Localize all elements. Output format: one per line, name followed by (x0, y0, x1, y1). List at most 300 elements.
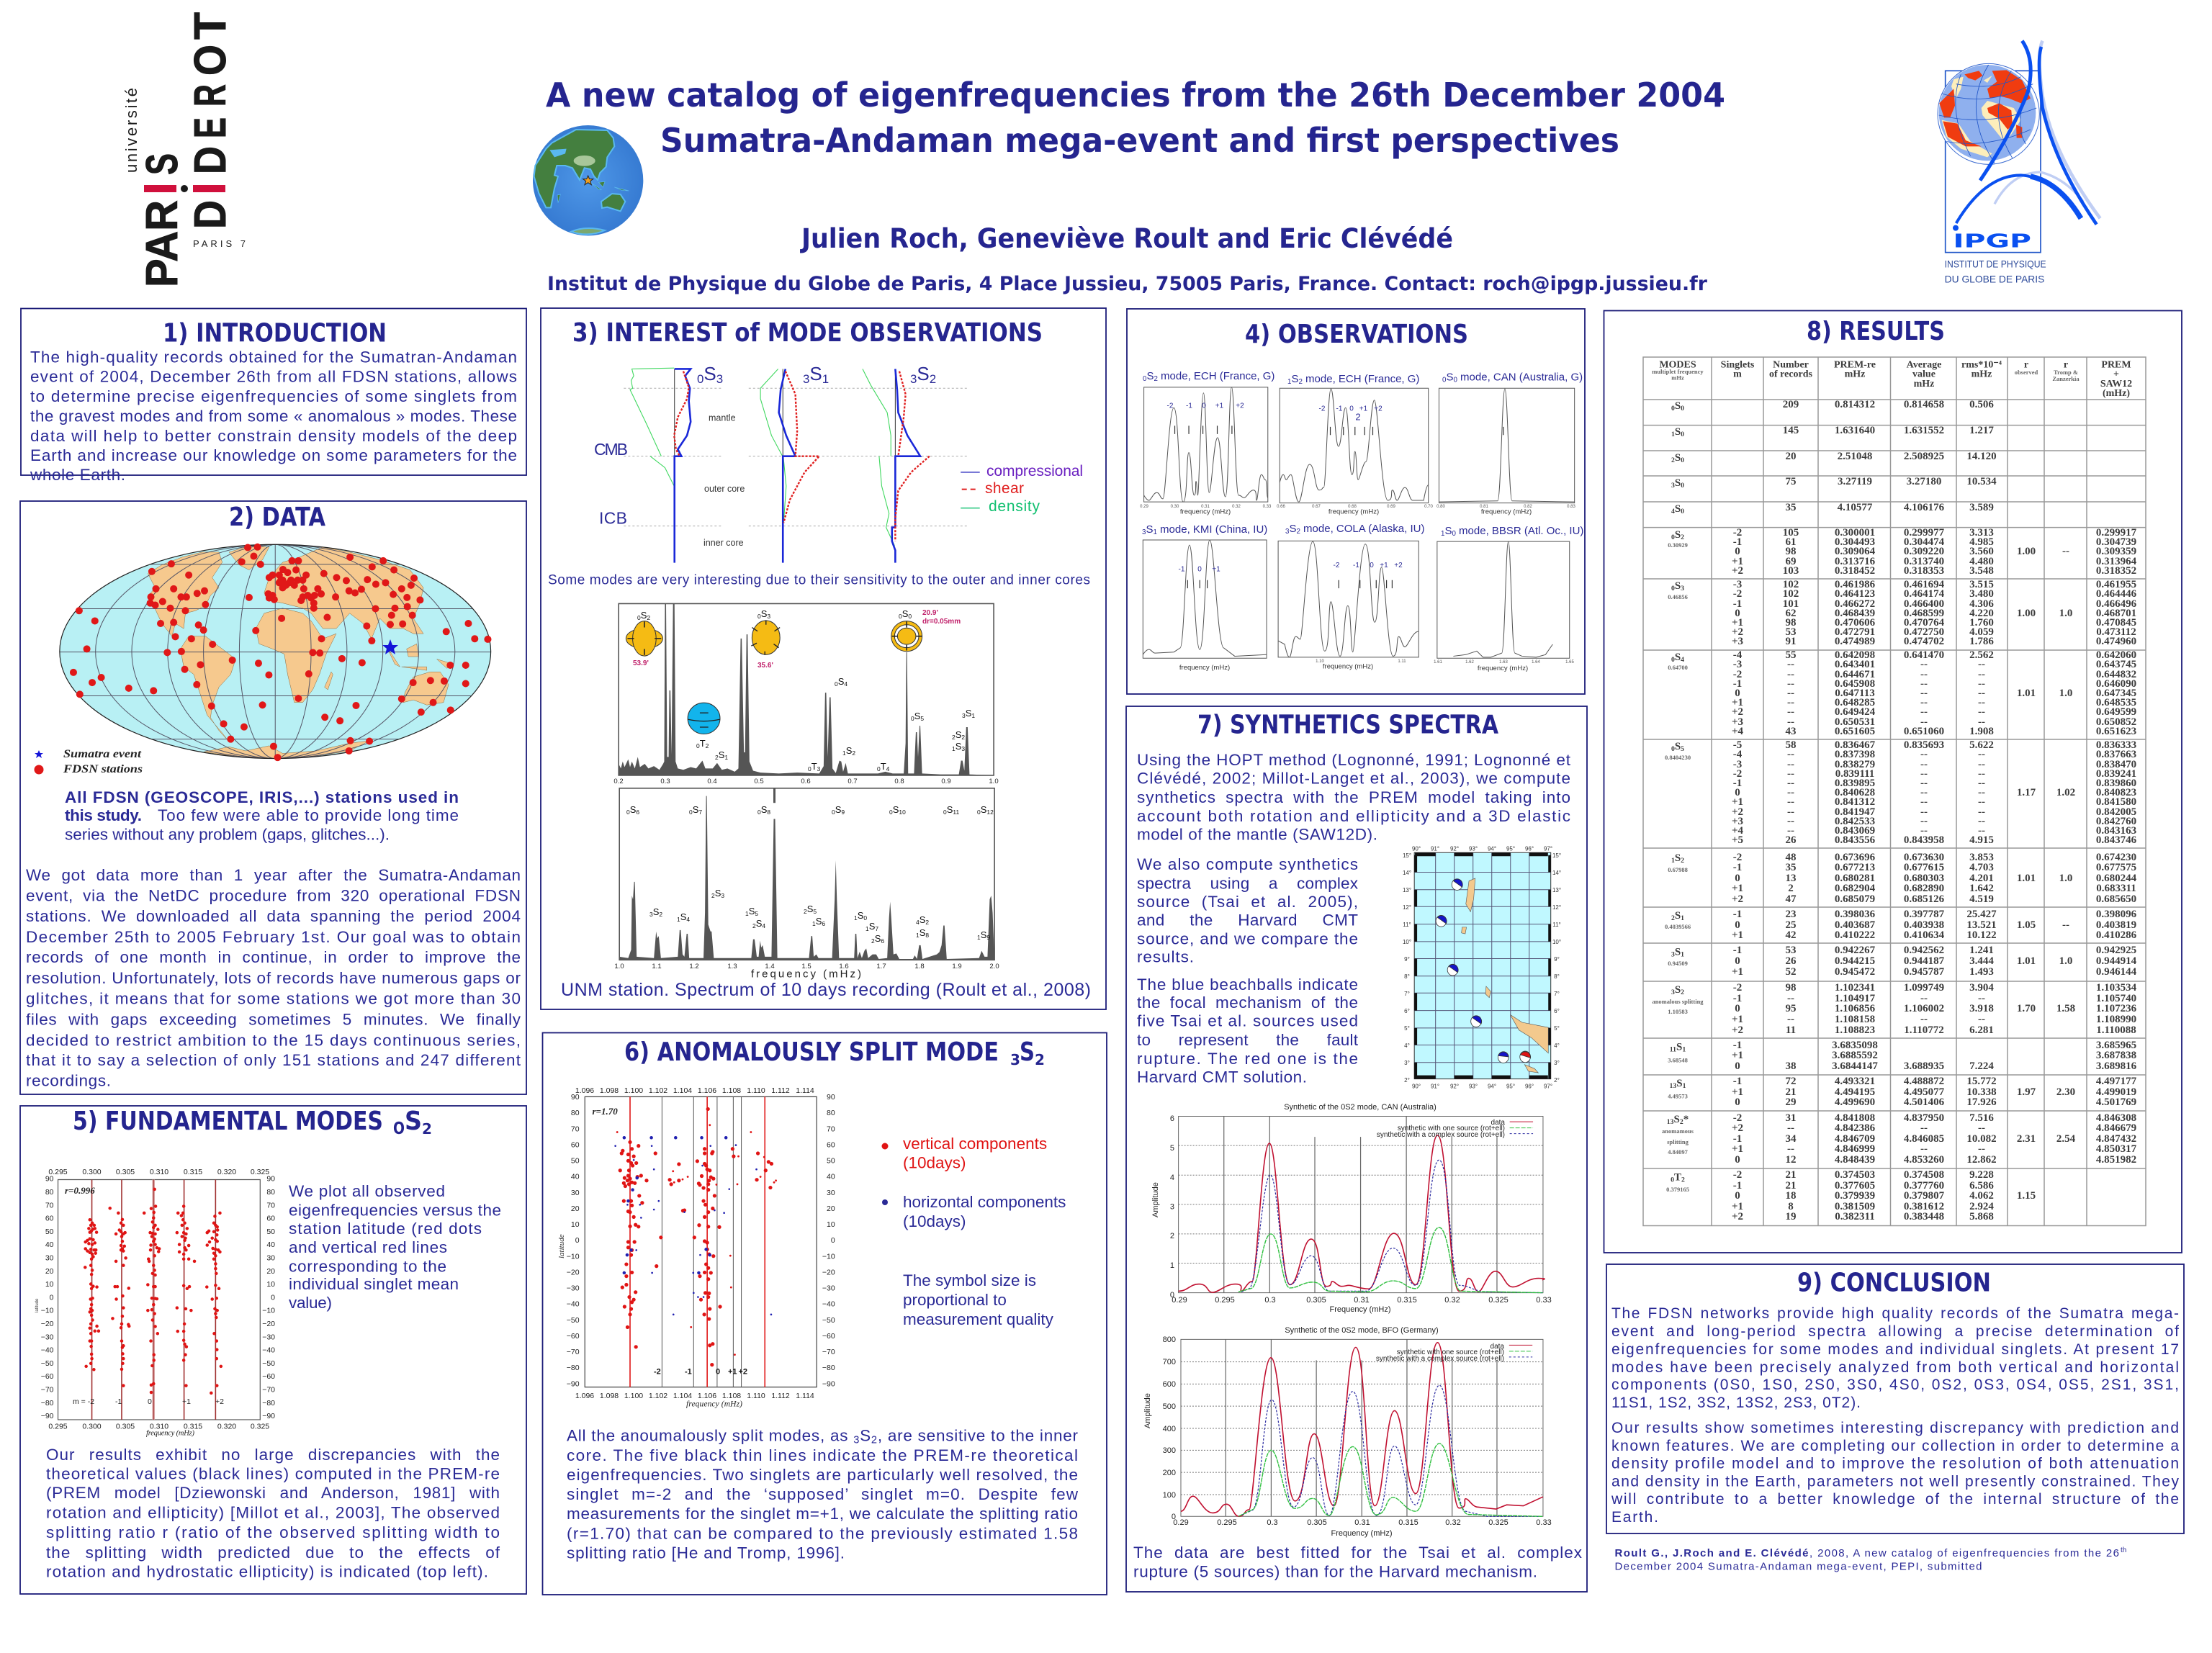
results table: 0.942925 0.944914 0.946144 (2096, 945, 2136, 978)
scatter plot: 3S2 singlets versus latitude: 30 (827, 1189, 835, 1197)
chart: mode sensitivity profiles: ICB (599, 508, 627, 527)
results table: 1.15 (2017, 1190, 2036, 1202)
results table: 0.397787 0.403938 0.410634 (1904, 909, 1944, 941)
map: Andaman sources and beachballs: 9° (1554, 956, 1560, 963)
chart: spectrum 1.0-2.0 mHz: 1.4 (765, 963, 775, 970)
results table: 53 26 52 (1786, 945, 1796, 978)
results table: 0.836467 0.837398 0.838279 0.839111 0.839895 0.840628 0.841312 0.841947 0.842533 0.843069 0.843556 (1835, 739, 1875, 846)
map caption: All FDSN (GEOSCOPE, IRIS,...) stations used in (65, 788, 459, 806)
text block: 11S1, 1S2, 3S2, 13S2, 2S3, 0T2). (1611, 1395, 1861, 1411)
results table: 23 25 42 (1786, 909, 1796, 941)
map: Andaman sources and beachballs: 95° (1506, 1083, 1515, 1090)
results table: 0.814658 (1904, 399, 1944, 410)
results table: 3.6835098 3.6885592 3.6844147 (1832, 1040, 1878, 1072)
map: Andaman sources and beachballs: 6° (1404, 1008, 1410, 1014)
plot description: We plot all observed (289, 1182, 445, 1200)
chart: spectrum 1.0-2.0 mHz: 1S5 (745, 906, 758, 917)
results table: m (1733, 369, 1742, 380)
panel: 4) Observations (1127, 309, 1585, 694)
chart: synthetic 0S2 CAN: 3 (1170, 1202, 1174, 1211)
scatter plot: 3S2 singlets versus latitude: 90 (827, 1093, 835, 1102)
results table: 1.70 (2017, 1003, 2036, 1014)
scatter plot: 3S2 singlets versus latitude: −80 (822, 1364, 835, 1372)
chart: spectrum 0.2-1.0 mHz: 53.9' (633, 659, 649, 667)
results table: 0.461986 0.464123 0.466272 0.468439 0.470606 0.472791 0.474989 (1835, 579, 1875, 647)
chart: spectrum 0.2-1.0 mHz: 0S3 (757, 608, 770, 620)
chart: spectrum 1.0-2.0 mHz: 1S0 (854, 910, 867, 922)
chart: synthetic 0S2 CAN (1151, 1103, 1552, 1314)
results table: 15.772 10.338 17.926 (1966, 1076, 1997, 1108)
results table: -4 -3 -2 -1 0 +1 +2 +3 +4 (1732, 649, 1743, 737)
legend: (10days) (903, 1212, 966, 1230)
world map of stations (60, 544, 491, 759)
results table: 145 (1783, 425, 1799, 436)
results table: 1S0 (1671, 426, 1684, 438)
results table: 21 21 18 8 19 (1786, 1169, 1796, 1222)
results table: 1.10583 (1668, 1008, 1688, 1015)
scatter plot: 0S2 singlets versus latitude: −10 (262, 1307, 275, 1315)
results table: 1.02 (2056, 787, 2075, 798)
title: Sumatra-Andaman mega-event and first perspectives (660, 121, 1619, 160)
results table: -- (2062, 546, 2069, 557)
results table: 0.942562 0.944187 0.945787 (1904, 945, 1944, 978)
chart: spectrum 1.0-2.0 mHz: 0S7 (689, 804, 702, 816)
chart: six singlet spectra: 0S2 mode, ECH (France, G) (1143, 370, 1274, 383)
chart: six singlet spectra: -2 (1319, 405, 1326, 413)
scatter plot: 0S2 singlets versus latitude: 0 (271, 1293, 275, 1302)
scatter plot: 0S2 singlets versus latitude: −20 (41, 1320, 54, 1328)
map: Andaman sources and beachballs: 90° (1412, 1083, 1421, 1090)
results table: -1 0 +1 (1732, 945, 1743, 978)
results table: 1.01 (2017, 688, 2036, 699)
chart: six singlet spectra: 1.63 (1499, 660, 1508, 665)
scatter plot: 3S2 singlets versus latitude: −70 (567, 1348, 580, 1356)
scatter plot: 0S2 singlets versus latitude: 20 (45, 1267, 54, 1276)
chart: six singlet spectra: 0 (1197, 566, 1202, 574)
text block: decided to restrict ambition to the 15 days continuous series, (26, 1031, 521, 1050)
results table: Number (1773, 360, 1809, 371)
icon: Earth globe (533, 125, 643, 235)
chart: six singlet spectra: 0.67 (1312, 505, 1321, 509)
panel: 7) Synthetics spectra (1126, 706, 1587, 1592)
logo: université Paris Diderot: D (186, 200, 235, 229)
results table: + (2113, 369, 2119, 380)
text block: (r=1.70) that can be compared to the previously estimated 1.58 (567, 1525, 1078, 1543)
text block: beachballs: rupture. The red one is the (1137, 1050, 1358, 1068)
results table: 2S0 (1671, 452, 1684, 464)
chart: six singlet spectra: 1.62 (1465, 660, 1474, 665)
text block: event of 2004, December 26th from all FDSN stations, allows (30, 367, 517, 385)
results table: 75 (1786, 476, 1796, 487)
text block: core. The five black thin lines indicate the PREM-re theoretical (567, 1446, 1078, 1464)
results table: 0.641470 -- -- -- -- -- -- -- 0.651060 (1904, 649, 1944, 737)
results table: 0.398036 0.403687 0.410222 (1835, 909, 1875, 941)
results table: 1.01 (2017, 955, 2036, 967)
map: Andaman sources and beachballs: 91° (1431, 1083, 1439, 1090)
chart: six singlet spectra: 2 (1355, 412, 1361, 423)
text block (1137, 751, 1571, 843)
scatter plot: 3S2 singlets versus latitude: 0 (716, 1368, 720, 1377)
results table: -2 -1 0 +1 +2 (1732, 852, 1743, 905)
results table: PREM-re (1834, 360, 1876, 371)
scatter plot: 3S2 singlets versus latitude: −10 (822, 1252, 835, 1261)
map: Andaman sources and beachballs: 93° (1469, 1083, 1478, 1090)
results table: mHz (1845, 369, 1865, 380)
legend: vertical components (903, 1135, 1047, 1153)
results table: Zanzerkia (2052, 375, 2080, 382)
scatter plot: 0S2 singlets versus latitude: −50 (41, 1359, 54, 1368)
chart: synthetic 0S2 BFO: Synthetic of the 0S2 mode, BFO (Germany) (1285, 1326, 1439, 1335)
chart: six singlet spectra: +1 (1359, 405, 1368, 413)
text block: glitches, it means that for some stations we got more than 30 (26, 989, 521, 1008)
scatter plot: 0S2 singlets versus latitude: frequency (mHz) (146, 1429, 194, 1437)
chart: six singlet spectra: 0 (1370, 562, 1374, 569)
chart: synthetic 0S2 CAN: 1 (1170, 1261, 1174, 1270)
caption: Some modes are very interesting due to their sensitivity to the outer and inner cores (548, 573, 1090, 588)
chart: spectrum 1.0-2.0 mHz: 2S6 (871, 933, 884, 945)
results table: 0.461955 0.464446 0.466496 0.468701 0.470845 0.473112 0.474960 (2096, 579, 2136, 647)
results table: 0.461694 0.464174 0.466400 0.468599 0.470764 0.472750 0.474702 (1904, 579, 1944, 647)
results table: mHz (1671, 374, 1684, 382)
text block: records of one month in continue, in order to improve the (26, 948, 521, 966)
scatter plot: 0S2 singlets versus latitude: 60 (266, 1215, 275, 1223)
results table: 1.102341 1.104917 1.106856 1.108158 1.108823 (1835, 982, 1875, 1036)
chart: synthetic 0S2 BFO: synthetic with one source (rot+ell) (1397, 1348, 1504, 1356)
logo: IPGP (1938, 41, 2100, 285)
chart: synthetic 0S2 CAN: 0.31 (1354, 1296, 1370, 1305)
scatter plot: 0S2 singlets versus latitude: −40 (41, 1346, 54, 1355)
text block: Our results show sometimes interesting discrepancy with prediction and (1611, 1420, 2179, 1436)
scatter plot: 3S2 singlets versus latitude: 20 (571, 1204, 580, 1213)
map: Andaman sources and beachballs: 96° (1525, 1083, 1534, 1090)
text block: We got data more than 1 year after the Sumatra-Andaman (26, 866, 521, 884)
chart: six singlet spectra: 0.33 (1263, 505, 1272, 509)
legend: proportional to (903, 1291, 1007, 1309)
scatter plot: 3S2 singlets versus latitude: 1.104 (673, 1086, 692, 1095)
map: Andaman sources and beachballs: 93° (1469, 845, 1478, 852)
text block: complex source: spectra using a complex (1137, 874, 1359, 892)
chart: synthetic 0S2 CAN: 0.325 (1488, 1296, 1509, 1305)
chart: spectrum 0.2-1.0 mHz: 0.2 (613, 778, 624, 785)
chart: spectrum 1.0-2.0 mHz: 1.3 (727, 963, 737, 970)
scatter plot: 0S2 singlets versus latitude: 60 (45, 1215, 54, 1223)
chart: synthetic 0S2 CAN: 0.29 (1172, 1296, 1187, 1305)
chart: synthetic 0S2 CAN: synthetic with one source (rot+ell) (1398, 1125, 1505, 1132)
results table: -- (2062, 919, 2069, 931)
map: Andaman sources and beachballs: 7° (1404, 991, 1410, 997)
map legend: Sumatra event (63, 748, 142, 760)
chart: six singlet spectra: +2 (1236, 402, 1244, 410)
results table: 0.67988 (1668, 866, 1688, 873)
panel: 2) Data (20, 501, 526, 1094)
results table: 11S1 (1670, 1042, 1686, 1054)
plot description (289, 1182, 501, 1312)
logo: université Paris Diderot: PARIS 7 (193, 238, 246, 249)
chart: spectrum 0.2-1.0 mHz: 2S2 (952, 729, 965, 741)
text block: Earth and increase our knowledge on some parameters for the (30, 446, 517, 464)
chart: synthetic 0S2 CAN: Amplitude (1151, 1182, 1160, 1217)
text block: account both rotation and ellipticity and a 3D elastic (1137, 807, 1570, 825)
scatter plot: 3S2 singlets versus latitude: +2 (739, 1368, 747, 1377)
scatter plot: 3S2 singlets versus latitude: −20 (567, 1268, 580, 1276)
chart: spectrum 0.2-1.0 mHz: 0.5 (754, 778, 764, 785)
chart: synthetic 0S2 CAN: 5 (1170, 1144, 1174, 1153)
scatter plot: 0S2 singlets versus latitude: 20 (266, 1267, 275, 1276)
chart: spectrum 0.2-1.0 mHz (613, 603, 999, 785)
results table: 2.31 (2017, 1133, 2036, 1145)
chart: synthetic 0S2 BFO: 600 (1163, 1380, 1176, 1389)
chart: spectrum 1.0-2.0 mHz: 1.5 (801, 963, 811, 970)
plot description: value) (289, 1294, 332, 1312)
results table: 1.01 (2017, 873, 2036, 884)
scatter plot: 3S2 singlets versus latitude: r=1.70 (592, 1106, 618, 1117)
chart: synthetic 0S2 CAN: data (1491, 1119, 1505, 1127)
scatter plot: 0S2 singlets versus latitude: 50 (266, 1228, 275, 1236)
chart: spectrum 0.2-1.0 mHz: 35.6' (757, 662, 773, 670)
results table: r (2024, 360, 2028, 371)
chart: six singlet spectra: 0.29 (1140, 505, 1148, 509)
chart: synthetic 0S2 CAN: synthetic with a complex source (rot+ell) (1377, 1131, 1505, 1139)
map: Andaman sources and beachballs: 14° (1552, 870, 1561, 876)
chart: spectrum 1.0-2.0 mHz: frequency (mHz) (751, 968, 861, 981)
results table: 4.841808 4.842386 4.846709 4.846999 4.848439 (1835, 1112, 1875, 1166)
results table: 0.674230 0.677575 0.680244 0.683311 0.685650 (2096, 852, 2136, 905)
chart: spectrum 1.0-2.0 mHz: 0S9 (832, 804, 845, 816)
map legend (35, 748, 143, 775)
map: Andaman sources and beachballs: 10° (1552, 939, 1561, 945)
results table: 105 61 98 69 103 (1783, 527, 1799, 577)
results table: 0.4039566 (1665, 923, 1691, 930)
scatter plot: 0S2 singlets versus latitude: 0.315 (184, 1423, 202, 1431)
results table: 0S5 (1671, 741, 1684, 753)
text block: event, via the NetDC procedure from 320 operational FDSN (26, 887, 521, 905)
scatter plot: 3S2 singlets versus latitude: 80 (827, 1109, 835, 1117)
results table: 2.30 (2056, 1086, 2075, 1098)
results table: 1.58 (2056, 1003, 2075, 1014)
results table: 1.00 (2017, 546, 2036, 557)
scatter plot: 3S2 singlets versus latitude: +1 (728, 1368, 737, 1377)
results table: 0.94509 (1668, 960, 1688, 967)
chart: spectrum 0.2-1.0 mHz: 0T3 (808, 761, 821, 773)
chart: spectrum 1.0-2.0 mHz (614, 788, 999, 981)
text block: density profile model and to improve the resolution of both attenuation (1611, 1456, 2179, 1472)
results table: 3S1 (1671, 946, 1684, 959)
map: Andaman sources and beachballs: 94° (1488, 845, 1496, 852)
results table: 1.103534 1.105740 1.107236 1.108990 1.110088 (2096, 982, 2136, 1036)
text block: eigenfrequencies. Two singlets are particularly well resolved, the (567, 1466, 1078, 1484)
results table: 1.05 (2017, 919, 2036, 931)
chart: synthetic 0S2 BFO: Amplitude (1143, 1393, 1152, 1428)
text block: beachballs: five Tsai et al. sources used (1137, 1012, 1358, 1030)
heading: 8) RESULTS (1807, 317, 1945, 346)
chart: six singlet spectra: 1.65 (1565, 660, 1574, 665)
results table: 1.631552 (1904, 425, 1944, 436)
chart: synthetic 0S2 BFO: 300 (1163, 1446, 1176, 1455)
scatter plot: 3S2 singlets versus latitude: 50 (827, 1156, 835, 1165)
chart: six singlet spectra: -1 (1353, 562, 1359, 569)
scatter plot: 3S2 singlets versus latitude: −50 (822, 1316, 835, 1325)
results table: 3.68548 (1668, 1057, 1688, 1064)
scatter plot: 0S2 singlets versus latitude: 0.325 (251, 1168, 269, 1176)
text block: will contribute to a better knowledge of the internal structure of the (1611, 1491, 2179, 1508)
text block: the gravest modes and from some « anomalous » modes. These (30, 407, 517, 425)
legend: horizontal components (903, 1193, 1066, 1211)
chart: spectrum 0.2-1.0 mHz: 0.7 (848, 778, 858, 785)
text block: splitting ratio [He and Tromp, 1996]. (567, 1544, 845, 1562)
scatter plot: 3S2 singlets versus latitude: −60 (822, 1332, 835, 1341)
chart: six singlet spectra: -2 (1334, 562, 1340, 569)
affiliation: Institut de Physique du Globe de Paris, 4 Place Jussieu, 75005 Paris, France. Contact: roch@ipgp.jussieu.fr (547, 273, 1708, 295)
chart: synthetic 0S2 CAN: 0 (1170, 1291, 1174, 1300)
chart: synthetic 0S2 BFO: 0.29 (1173, 1518, 1189, 1527)
chart: spectrum 0.2-1.0 mHz: 0.9 (941, 778, 951, 785)
chart: spectrum 1.0-2.0 mHz: 2S4 (752, 918, 765, 929)
results table: 0S2 (1671, 529, 1684, 541)
results table: of records (1769, 369, 1813, 380)
chart: spectrum 0.2-1.0 mHz: 20.9' (922, 609, 938, 617)
chart: spectrum 1.0-2.0 mHz: 1.1 (652, 963, 662, 970)
logo: université Paris Diderot: T (186, 12, 235, 40)
chart: mode sensitivity profiles: shear (985, 480, 1024, 497)
text block: fit conclusion: The data are best fitted for the Tsai et al. complex (1133, 1544, 1583, 1562)
results table: 0.642060 0.643745 0.644832 0.646090 0.647345 0.648535 0.649599 0.650852 0.651623 (2096, 649, 2136, 737)
results table: 0S4 (1671, 652, 1684, 664)
heading: S (405, 1107, 422, 1136)
scatter plot: 0S2 singlets versus latitude: 90 (266, 1175, 275, 1184)
chart: spectrum 0.2-1.0 mHz: 0S4 (835, 676, 848, 688)
scatter plot: 3S2 singlets versus latitude: −80 (567, 1364, 580, 1372)
logo: université Paris Diderot: PAR (138, 200, 187, 287)
results table: 4.493321 4.494195 4.499690 (1835, 1076, 1875, 1108)
chart: mode sensitivity profiles: compressional (986, 463, 1083, 479)
reference citation (1614, 1546, 2126, 1572)
scatter plot: 0S2 singlets versus latitude: −60 (262, 1372, 275, 1381)
chart: spectrum 1.0-2.0 mHz: 1.0 (614, 963, 624, 970)
chart: six singlet spectra: frequency (mHz) (1179, 664, 1230, 672)
scatter plot: 0S2 singlets versus latitude: 40 (45, 1240, 54, 1249)
chart: six singlet spectra: 0.32 (1232, 505, 1241, 509)
text block: complex source: results. (1137, 947, 1194, 965)
scatter plot: 0S2 singlets versus latitude: −60 (41, 1372, 54, 1381)
scatter plot: 0S2 singlets versus latitude: 70 (45, 1201, 54, 1210)
results table: 5.622 -- -- -- -- -- -- -- -- -- 4.915 (1969, 739, 1994, 846)
chart: spectrum 0.2-1.0 mHz: 1S2 (842, 745, 855, 757)
chart: six singlet spectra: +2 (1394, 562, 1403, 569)
map caption: Too few were able to provide long time (158, 806, 459, 824)
results table: -1 +1 0 (1732, 1076, 1743, 1108)
chart: spectrum 0.2-1.0 mHz: 1.0 (989, 778, 999, 785)
results table: 0.836333 0.837663 0.838470 0.839241 0.839860 0.840823 0.841580 0.842005 0.842760 0.843163 0.843746 (2096, 739, 2136, 846)
map: Andaman sources and beachballs: 8° (1554, 973, 1560, 980)
chart: synthetic 0S2 BFO: 100 (1163, 1491, 1176, 1500)
heading: 2 (422, 1120, 432, 1138)
text block: theoretical values (black lines) computed in the PREM-re (46, 1464, 500, 1483)
scatter plot: 0S2 singlets versus latitude: −80 (262, 1399, 275, 1407)
chart: six singlet spectra: 1.11 (1398, 659, 1406, 664)
scatter plot: 0S2 singlets versus latitude: 0.325 (251, 1423, 269, 1431)
map: Andaman sources and beachballs: 3° (1404, 1060, 1410, 1066)
results table: 0.30929 (1668, 541, 1688, 549)
chart: synthetic 0S2 CAN: 0.32 (1444, 1296, 1460, 1305)
text block: Our results exhibit no large discrepancies with the (46, 1446, 500, 1464)
scatter plot: 3S2 singlets versus latitude: 30 (571, 1189, 580, 1197)
title (546, 76, 1725, 160)
scatter plot: 0S2 singlets versus latitude: −90 (262, 1412, 275, 1420)
map: Andaman sources and beachballs: 4° (1554, 1042, 1560, 1049)
text block: to determine precise eigenfrequencies of some singlets from (30, 387, 517, 405)
chart: spectrum 1.0-2.0 mHz: 1.6 (839, 963, 849, 970)
text block: whole Earth. (30, 466, 125, 484)
chart: spectrum 1.0-2.0 mHz: 2S5 (804, 904, 817, 915)
chart: six singlet spectra: 3S1 mode, KMI (China, IU) (1142, 523, 1267, 536)
text block: data will help to better constrain density models of the deep (30, 427, 517, 445)
reference citation: , 2008, A new catalog of eigenfrequencies from the 26 (1809, 1547, 2119, 1559)
scatter plot: 3S2 singlets versus latitude: 1.102 (649, 1392, 667, 1400)
chart: six singlet spectra: +1 (1380, 562, 1388, 569)
chart: six singlet spectra: 0 (1349, 405, 1354, 413)
logo: université Paris Diderot: O (186, 45, 235, 76)
results table: 1.17 (2017, 787, 2036, 798)
results table: 10.534 (1966, 476, 1997, 487)
text block: eigenfrequencies for some modes and individual singlets. At present 17 (1611, 1341, 2179, 1358)
panel: 3) Interest of mode observations (541, 308, 1106, 1009)
scatter plot: 0S2 singlets versus latitude: -1 (115, 1397, 122, 1406)
results table: 0.299977 0.304474 0.309220 0.313740 0.318353 (1904, 527, 1944, 577)
results table: -1 +1 0 (1732, 1040, 1743, 1072)
results table: 0.379165 (1666, 1186, 1689, 1193)
chart: six singlet spectra: 0.66 (1277, 505, 1285, 509)
chart: six singlet spectra: 0.82 (1524, 505, 1532, 509)
results table: 0.374508 0.377760 0.379807 0.381612 0.383448 (1904, 1169, 1944, 1222)
chart: six singlet spectra: 1.64 (1532, 660, 1540, 665)
results table: -2 -1 0 +1 +2 (1732, 1169, 1743, 1222)
scatter plot: 0S2 singlets versus latitude: 0.310 (150, 1423, 168, 1431)
map: Andaman sources and beachballs (1403, 845, 1561, 1090)
text block: complex source: source (Tsai et al. 2005), (1137, 893, 1358, 911)
results table: 3.27119 (1838, 476, 1872, 487)
text block: Clévédé, 2002; Millot-Langet et al., 2003), we compute (1137, 770, 1570, 788)
results table: -2 -1 0 +1 +2 (1732, 527, 1743, 577)
scatter plot: 0S2 singlets versus latitude: −80 (41, 1399, 54, 1407)
scatter plot: 0S2 singlets versus latitude: 80 (266, 1188, 275, 1197)
chart: six singlet spectra: -1 (1336, 405, 1343, 413)
results table: 13S2* (1667, 1114, 1689, 1126)
results table: 3.515 3.480 4.306 4.220 1.760 4.059 1.786 (1969, 579, 1994, 647)
results table: r (2064, 360, 2068, 371)
chart: spectrum 0.2-1.0 mHz: 0S0 (899, 608, 912, 620)
caption: UNM station. Spectrum of 10 days recording (Roult et al., 2008) (561, 980, 1091, 1000)
panel: 6) Anomalously split mode (543, 1032, 1107, 1595)
scatter plot: 0S2 singlets versus latitude: 0 (50, 1293, 54, 1302)
map: Andaman sources and beachballs: 5° (1554, 1025, 1560, 1032)
scatter plot: 0S2 singlets versus latitude: −30 (262, 1333, 275, 1341)
results table (1643, 357, 2146, 1226)
text block: fit conclusion: rupture (5 sources) than for the Harvard mechanism. (1133, 1563, 1537, 1581)
results table: 4.497177 4.499019 4.501769 (2096, 1076, 2136, 1108)
map: Andaman sources and beachballs: 8° (1404, 973, 1410, 980)
results table: 0.300001 0.304493 0.309064 0.313716 0.318452 (1835, 527, 1875, 577)
map: Andaman sources and beachballs: 91° (1431, 845, 1439, 852)
chart: mode sensitivity profiles: outer core (704, 484, 745, 494)
map: Andaman sources and beachballs: 92° (1450, 845, 1459, 852)
results table: 13S1 (1670, 1078, 1686, 1090)
chart: six singlet spectra: 0.69 (1387, 505, 1395, 509)
scatter plot: 3S2 singlets versus latitude: 1.112 (771, 1086, 790, 1095)
scatter plot: 3S2 singlets versus latitude: frequency (mHz) (686, 1400, 742, 1408)
map: Andaman sources and beachballs: 90° (1412, 845, 1421, 852)
text block: December 25th to 2005 February 1st. Our goal was to obtain (26, 928, 521, 946)
map: Andaman sources and beachballs: 12° (1552, 904, 1561, 911)
